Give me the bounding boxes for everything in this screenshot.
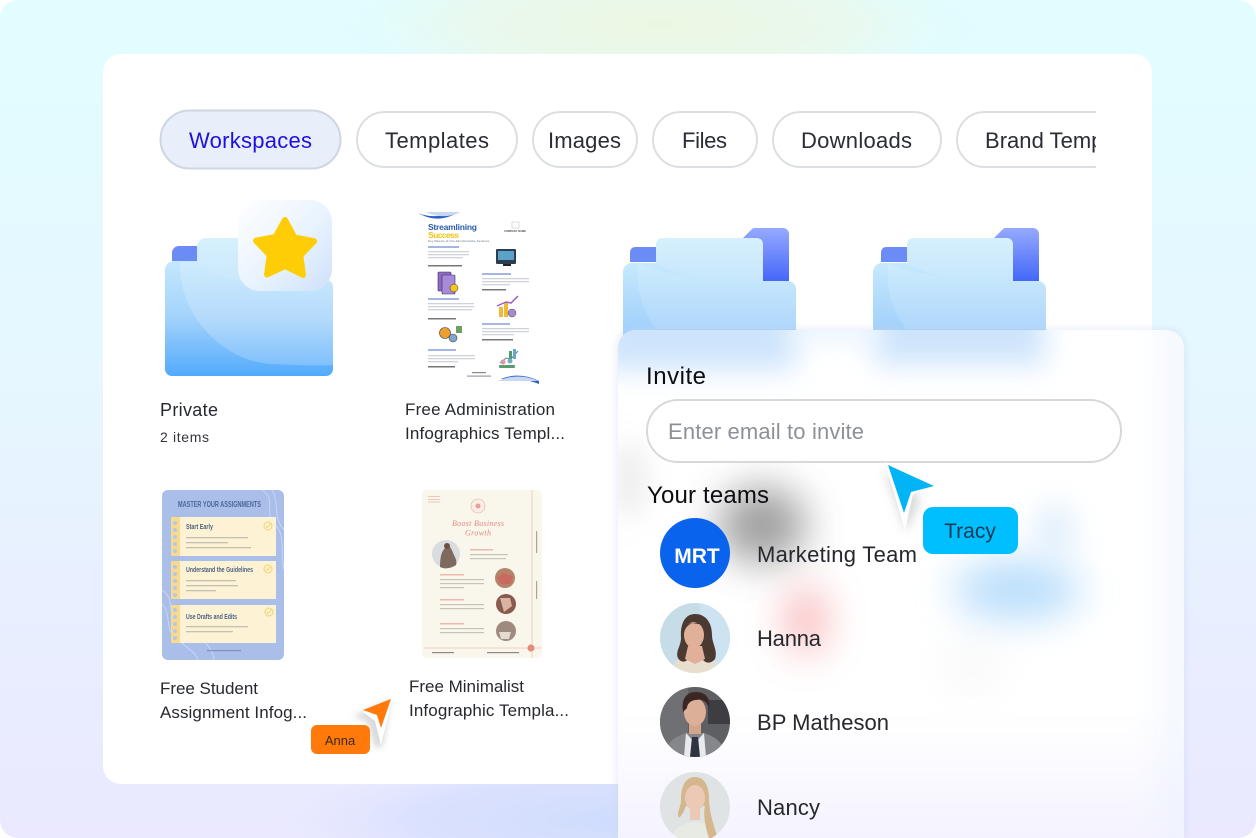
avatar: MRT [660, 518, 730, 588]
thumbnail: Master Your Assignments infographic: Start Early [186, 522, 214, 531]
email input [647, 400, 1121, 462]
email input: Enter email to invite [668, 419, 864, 444]
cursor: Tracy [884, 462, 1018, 554]
thumbnail: Boost Business Growth infographic: Boost Business [452, 519, 504, 528]
main white panel [103, 54, 1152, 784]
label: Free Student Assignment Infographic: Assignment Infog... [160, 703, 307, 722]
tab: Templates: Templates [385, 128, 489, 153]
avatar: MRT: MRT [674, 545, 720, 568]
thumbnail: Master Your Assignments infographic [162, 490, 284, 660]
thumbnail: Boost Business Growth infographic [422, 490, 542, 658]
heading: Your teams: Your teams [647, 482, 769, 509]
icon: cyan arrow [888, 465, 934, 513]
name: BP Matheson: BP Matheson [757, 710, 889, 735]
icon: star [256, 220, 314, 275]
heading: Invite: Invite [646, 363, 706, 390]
folder: Private with star [165, 200, 333, 376]
tab: Workspaces (active) [160, 110, 340, 168]
tab: Brand Templates (clipped) [956, 111, 1096, 168]
invite panel [615, 327, 1185, 838]
tab bar [160, 110, 1177, 168]
tab: Files: Files [682, 128, 727, 153]
icon: orange arrow [363, 699, 391, 728]
tab: Images: Images [548, 128, 621, 153]
label: Free Minimalist Infographic Template [409, 677, 569, 720]
label: Private: Private [160, 400, 218, 420]
label: Free Student Assignment Infographic: Free Student [160, 679, 258, 698]
label: Free Minimalist Infographic Template: Free Minimalist [409, 677, 524, 696]
folder: row 1 column 4 [873, 228, 1046, 339]
avatar: Nancy [660, 772, 730, 838]
thumbnail: Boost Business Growth infographic: Growth [465, 528, 491, 538]
cursor: Anna [311, 699, 392, 754]
thumbnail: Master Your Assignments infographic: Use Drafts and Edits [186, 612, 237, 621]
thumbnail: Streamlining Success infographic: Key Metrics of Our Administrative Services [428, 239, 490, 243]
label: 2 items: 2 items [160, 429, 209, 445]
thumbnail: Streamlining Success infographic: Streamlining [428, 222, 477, 232]
thumbnail: Streamlining Success infographic: COMPANY NAME [504, 229, 526, 233]
label: Free Student Assignment Infographic [160, 679, 307, 722]
avatar: BP Matheson [660, 687, 730, 757]
label: Free Administration Infographics Template: Infographics Templ... [405, 424, 565, 443]
folder: row 1 column 3 [623, 228, 796, 339]
avatar: Hanna [660, 603, 730, 673]
name: Marketing Team: Marketing Team [757, 542, 917, 567]
tab: Downloads [773, 112, 941, 167]
tab: Downloads: Downloads [801, 128, 912, 153]
label: Free Administration Infographics Template [405, 400, 565, 443]
label: Free Minimalist Infographic Template: Infographic Templa... [409, 701, 569, 720]
thumbnail: Streamlining Success infographic: Success [428, 230, 459, 240]
tab: Images [533, 112, 637, 167]
cursor: Tracy: Tracy [944, 520, 996, 543]
tab: Brand Templates (clipped): Brand Templates [985, 128, 1150, 153]
tab: Files [653, 112, 757, 167]
thumbnail: Master Your Assignments infographic: MASTER YOUR ASSIGNMENTS [178, 499, 261, 509]
name: Hanna: Hanna [757, 626, 822, 651]
thumbnail: Streamlining Success infographic [417, 212, 541, 384]
tab: Templates [357, 112, 517, 167]
label: Free Administration Infographics Template: Free Administration [405, 400, 555, 419]
cursor: Anna: Anna [325, 733, 356, 748]
tab: Workspaces (active): Workspaces [189, 128, 312, 153]
thumbnail: Master Your Assignments infographic: Understand the Guidelines [186, 565, 253, 574]
name: Nancy: Nancy [757, 795, 820, 820]
